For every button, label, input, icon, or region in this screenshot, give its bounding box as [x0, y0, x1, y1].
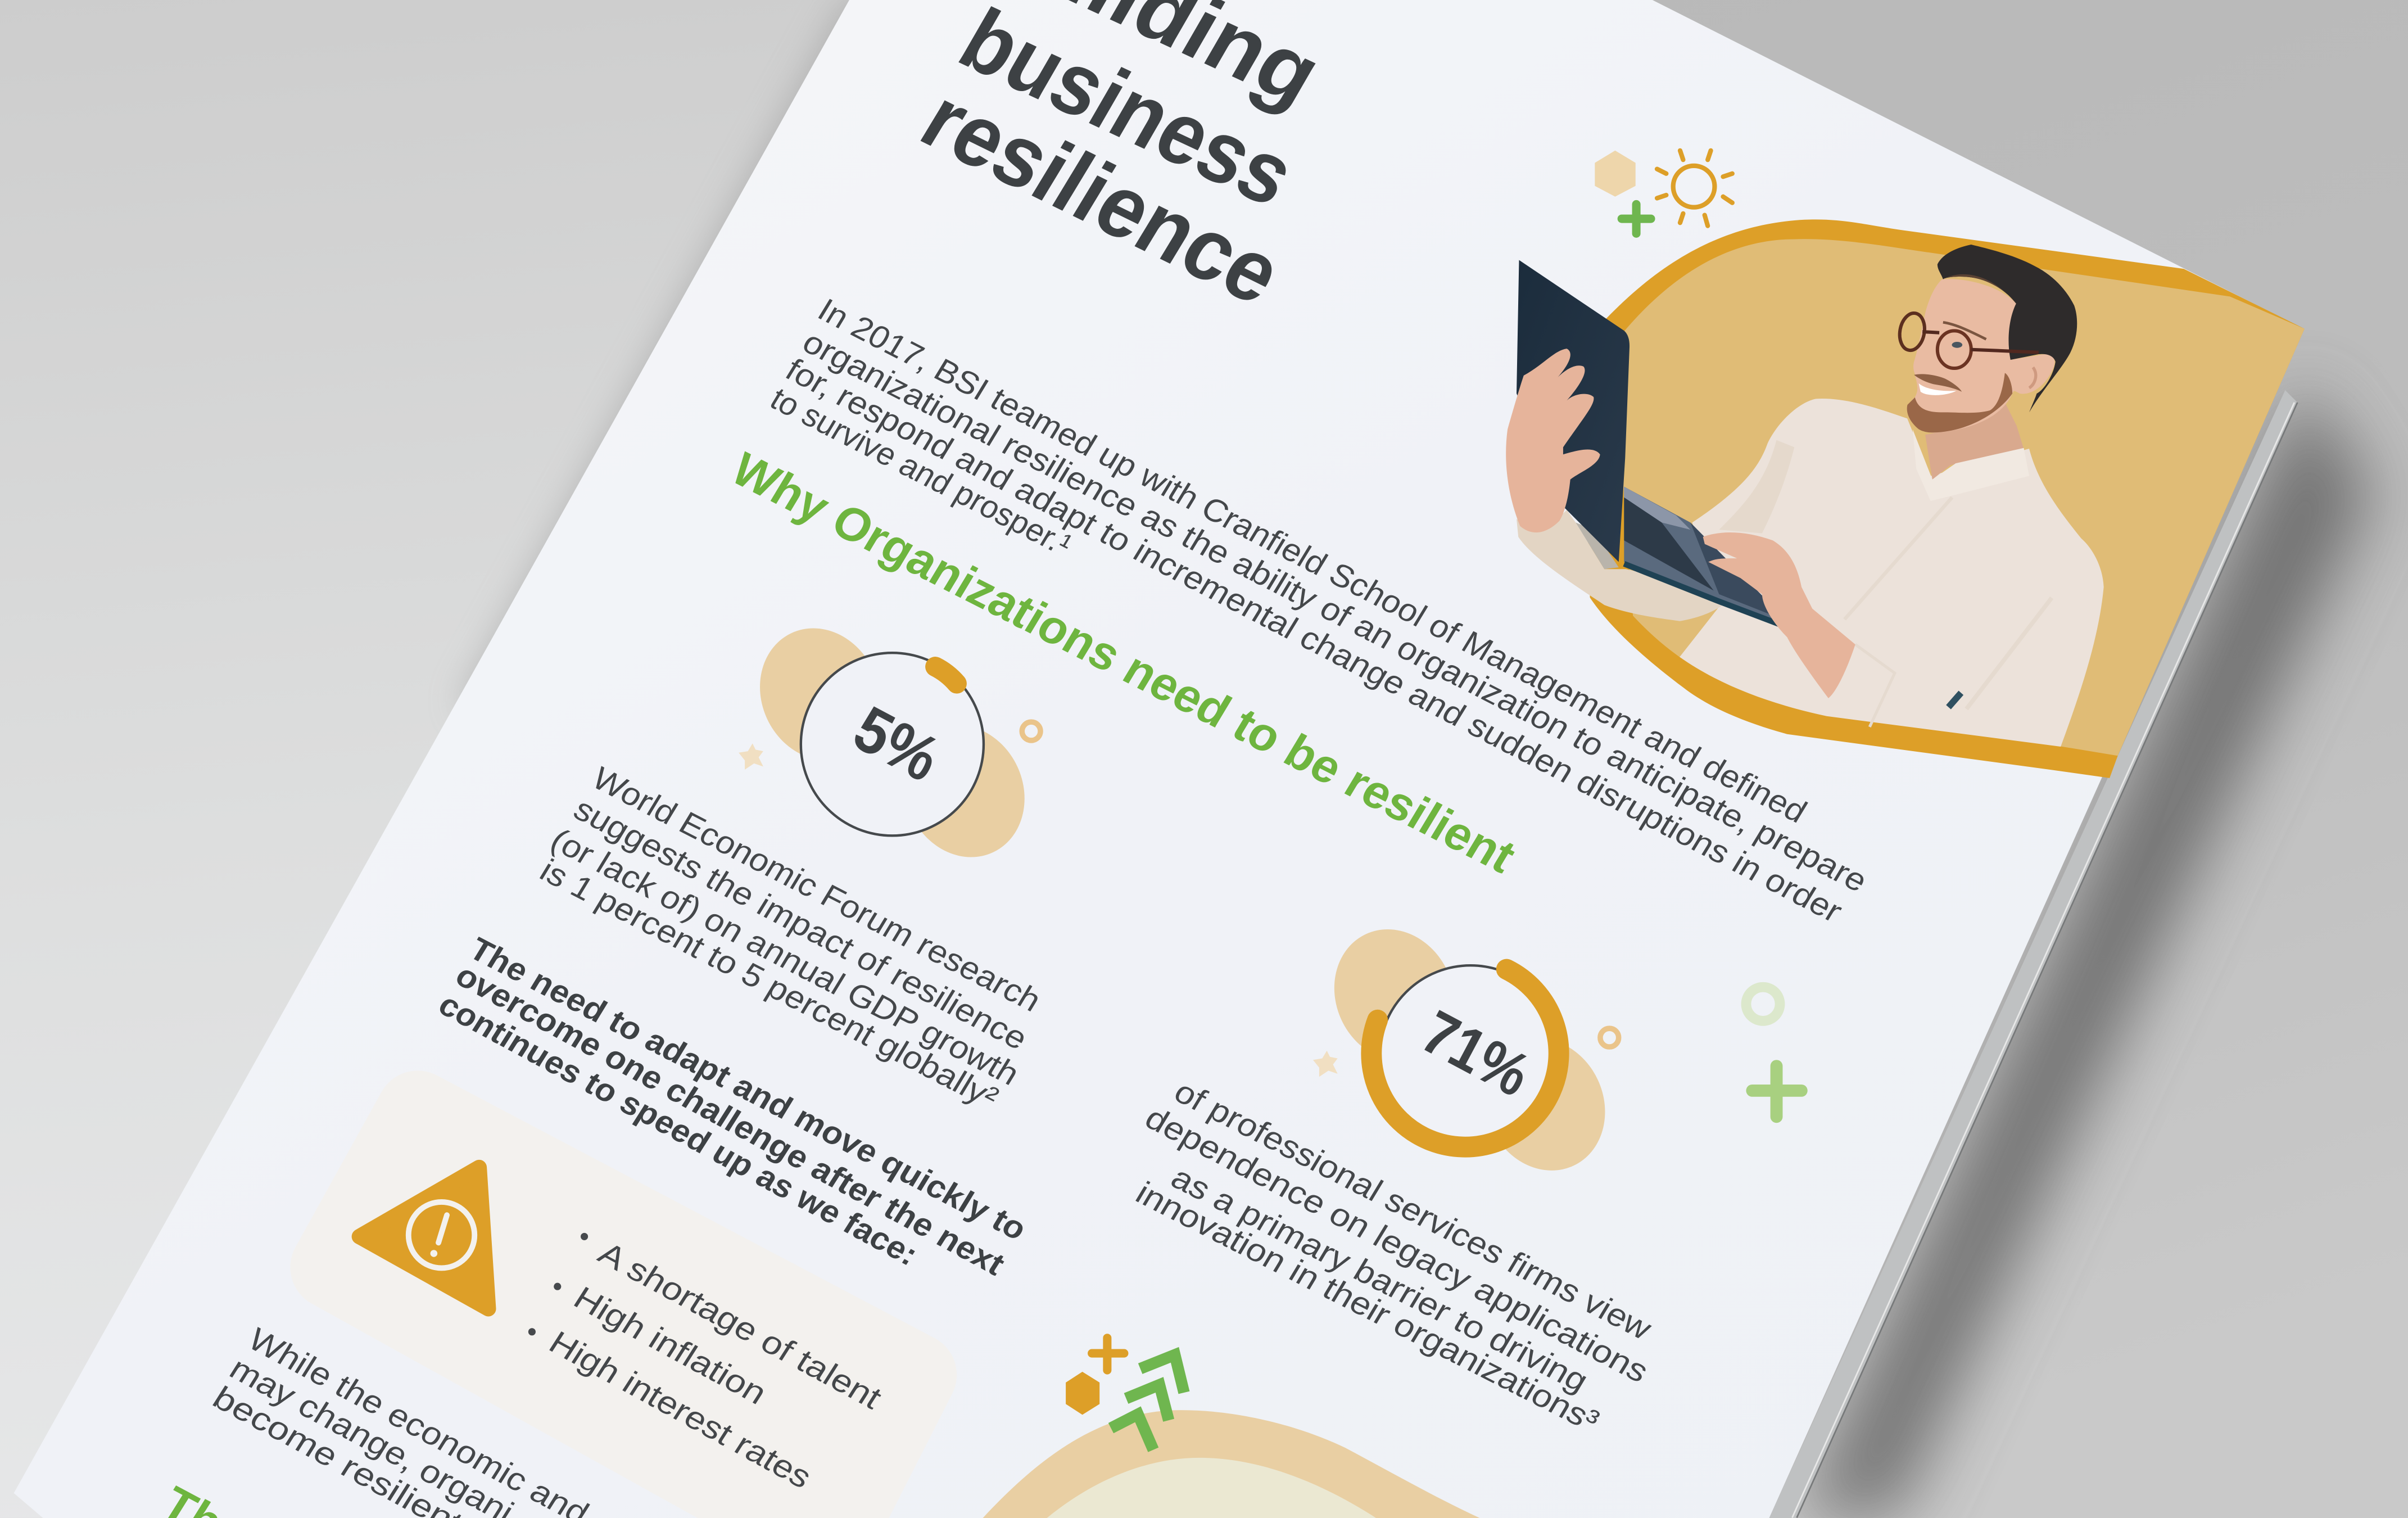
heading: why organizations need to be resilient: Why Organizations need to be resilient	[723, 442, 1525, 883]
intro paragraph: organizational resilience as the ability of an organization to anticipate, prepare	[796, 324, 1873, 899]
text: World Economic Forum research	[534, 760, 1047, 1116]
gold panel fill	[1613, 239, 2305, 756]
text: professional services firms: dependence on legacy applications	[1139, 1100, 1655, 1390]
stat: 5 percent ring	[739, 608, 1046, 877]
text: World Economic Forum research: suggests the impact of resilience	[568, 791, 1034, 1057]
icon: warning triangle	[359, 1167, 488, 1309]
decorative icons: hexagon, sun and plus	[1595, 151, 1732, 233]
text: professional services firms: of professional services firms view	[1168, 1074, 1658, 1347]
intro paragraph: for, respond and adapt to incremental change and sudden disruptions in order	[780, 352, 1849, 929]
list: challenges	[528, 1233, 888, 1496]
photo panel: gold shape with man holding a laptop	[1506, 219, 2305, 778]
text: World Economic Forum research: World Economic Forum research	[586, 760, 1047, 1019]
text: while the economic: become resilient	[206, 1380, 469, 1518]
list: challenges: High inflation	[567, 1280, 773, 1412]
bold statement: continues to speed up as we face:	[432, 987, 924, 1273]
book page stack edge	[1769, 390, 2297, 1518]
text: professional services firms	[1130, 1074, 1658, 1439]
stat: 71 percent ring: 71%	[1411, 997, 1541, 1110]
man body and laptop	[1506, 260, 2104, 747]
gold band shape	[1582, 219, 2305, 778]
decorative icons: plus, hexagon and green chevrons	[983, 1338, 1479, 1518]
decorative icons: pale green ring and plus	[1746, 987, 1802, 1117]
bold statement: overcome one challenge after the next	[449, 957, 1011, 1282]
stat: 71 percent ring	[1313, 910, 1626, 1190]
text: while the economic: While the economic and	[242, 1321, 595, 1518]
text: World Economic Forum research: (or lack of) on annual GDP growth	[545, 822, 1025, 1092]
text: professional services firms: innovation in their organizations³	[1130, 1175, 1605, 1439]
list: challenges: High interest rates	[543, 1325, 818, 1496]
text: professional services firms: as a primary barrier to driving	[1165, 1160, 1594, 1399]
intro paragraph: to survive and prosper.¹	[764, 381, 1078, 563]
list: challenges: A shortage of talent	[592, 1235, 888, 1416]
stat: 5 percent ring: 5%	[843, 692, 951, 796]
man head with glasses	[1897, 245, 2077, 433]
panel: challenges callout	[332, 1112, 915, 1518]
bold statement: The need to adapt and move quickly to	[463, 931, 1033, 1248]
text: World Economic Forum research: is 1 percent to 5 percent globally²	[534, 852, 1004, 1116]
intro paragraph: In 2017, BSI teamed up with Cranfield School of Management and defined	[812, 292, 1813, 830]
arch behind the chevrons	[983, 1410, 1479, 1518]
title: resilience	[906, 69, 1299, 323]
text: while the economic: may change, organi	[223, 1350, 520, 1518]
